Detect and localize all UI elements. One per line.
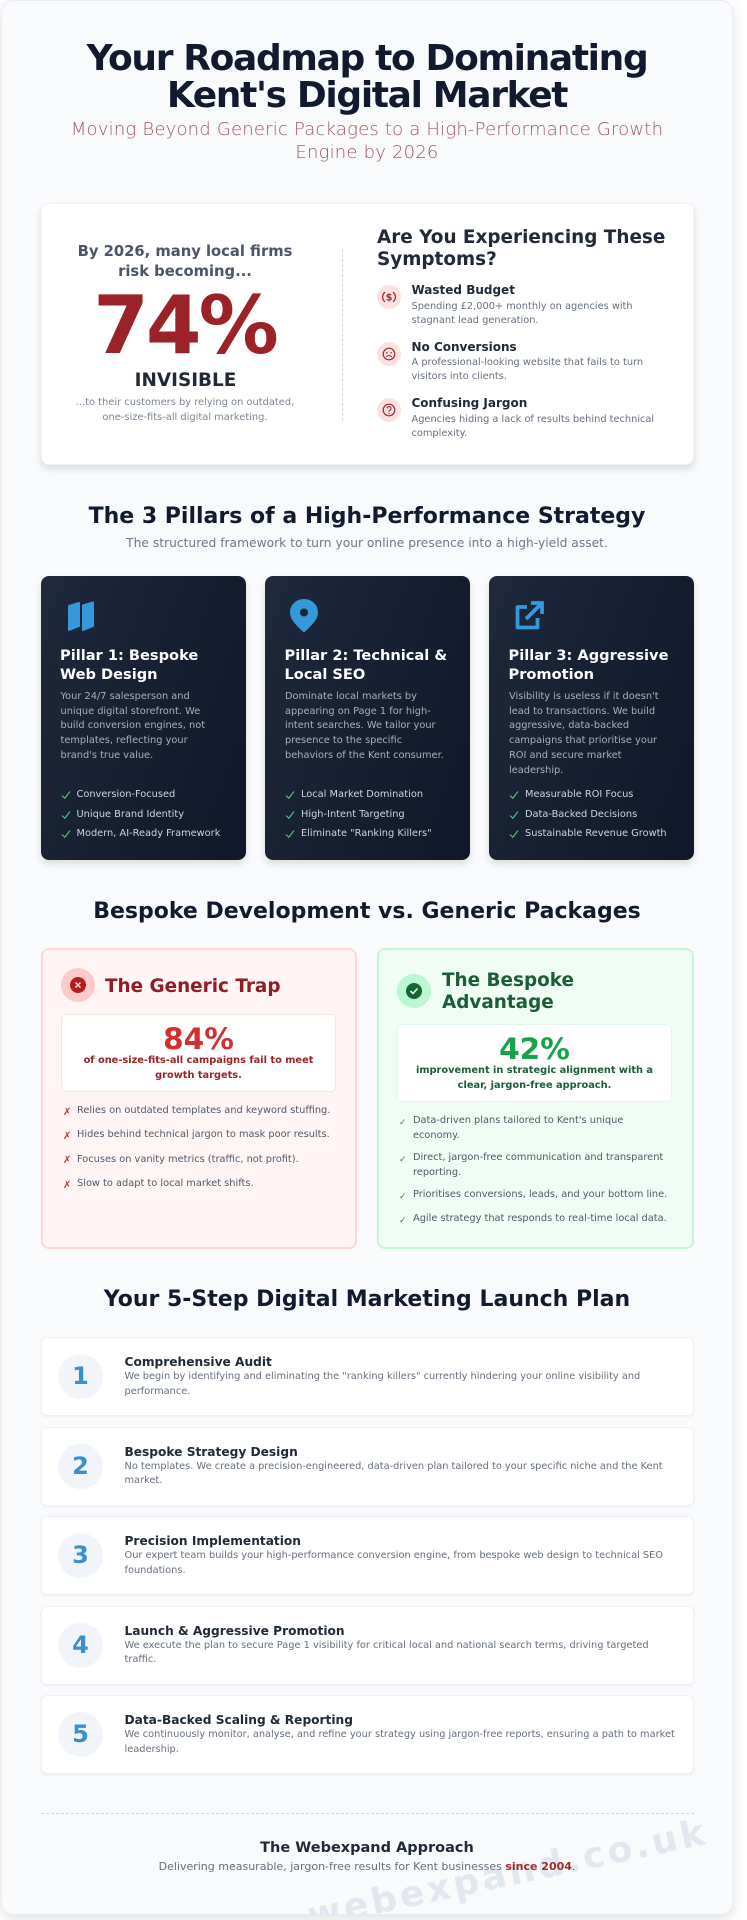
stat caption: ...to their customers by relying on outdated, — [76, 397, 294, 408]
step 2 — [41, 1426, 694, 1506]
panel heading: The Bespoke — [442, 970, 574, 991]
panel: the bespoke advantage — [377, 948, 694, 1249]
list text: Relies on outdated templates and keyword stuffing. — [77, 1105, 330, 1116]
benefit list — [510, 789, 667, 839]
check label: Eliminate "Ranking Killers" — [301, 828, 432, 839]
list text: Focuses on vanity metrics (traffic, not profit). — [77, 1154, 299, 1164]
icon: question circle — [377, 398, 401, 422]
pillar body: lead to transactions. We build — [509, 706, 655, 717]
stat box — [61, 1014, 336, 1092]
panel heading — [442, 970, 574, 1013]
check label: Unique Brand Identity — [76, 809, 184, 820]
pillar body — [60, 691, 205, 761]
icon: check circle — [397, 974, 431, 1008]
list text — [413, 1114, 623, 1143]
step title: Precision Implementation — [124, 1534, 301, 1548]
pillar body: aggressive, data-backed — [509, 720, 629, 731]
stat description: of one-size-fits-all campaigns fail to meet — [84, 1055, 313, 1066]
step number: 1 — [72, 1362, 89, 1390]
big stat: 74%: 74% — [93, 279, 276, 372]
symptoms heading: Symptoms? — [377, 249, 497, 270]
stat: 84%: 84% — [163, 1022, 234, 1056]
list text: Slow to adapt to local market shifts. — [77, 1178, 254, 1189]
benefit list — [286, 789, 432, 839]
icon: map pages — [68, 602, 94, 631]
subtitle: Engine by 2026 — [295, 142, 439, 163]
check item — [62, 830, 70, 838]
pillar heading: Promotion — [508, 666, 594, 683]
heading: launch plan: Your 5-Step Digital Marketing Launch Plan — [104, 1287, 630, 1312]
pillar body: Your 24/7 salesperson and — [60, 691, 190, 702]
pillar body: unique digital storefront. We — [60, 706, 200, 717]
step description: Our expert team builds your high-performance conversion engine, from bespoke web design to technical SEO — [124, 1550, 663, 1561]
pillar body: presence to the specific — [285, 735, 402, 746]
icon: location pin — [290, 599, 318, 632]
step number — [58, 1354, 103, 1399]
heading: comparison: Bespoke Development vs. Generic Packages — [93, 899, 641, 924]
pillar body: campaigns that prioritise your — [509, 735, 657, 746]
check label: Sustainable Revenue Growth — [525, 828, 667, 839]
panel: the generic trap — [41, 948, 357, 1249]
advantage list — [397, 1114, 687, 1229]
panel heading: The Generic Trap — [105, 976, 280, 997]
symptom description — [412, 356, 643, 382]
symptoms heading: Are You Experiencing These — [377, 227, 665, 248]
pillar body: leadership. — [509, 765, 563, 776]
step description — [124, 1728, 675, 1757]
pillar heading — [284, 646, 447, 683]
step description: foundations. — [124, 1565, 186, 1576]
icon: dollar circle — [377, 285, 401, 309]
check label: High-Intent Targeting — [301, 809, 405, 820]
list text: Prioritises conversions, leads, and your bottom line. — [413, 1189, 667, 1200]
step description: No templates. We create a precision-engineered, data-driven plan tailored to your specific niche and the Kent — [124, 1460, 663, 1472]
benefit list — [62, 789, 220, 839]
tick: ✓ — [399, 1155, 407, 1165]
panel heading: Advantage — [442, 992, 554, 1013]
stat: 42%: 42% — [499, 1032, 570, 1066]
step title: Comprehensive Audit — [124, 1355, 272, 1369]
stat description: growth targets. — [155, 1070, 242, 1081]
pillar body — [509, 691, 659, 776]
tick: ✓ — [399, 1216, 407, 1226]
symptom description: A professional-looking website that fails to turn — [412, 356, 643, 368]
cross: ✗ — [63, 1107, 71, 1118]
pillar body: Dominate local markets by — [285, 691, 417, 702]
cross: ✗ — [63, 1180, 71, 1191]
step number — [58, 1622, 103, 1668]
panel: pillar 1 — [40, 576, 246, 860]
check item — [510, 791, 518, 800]
symptom: confusing jargon — [377, 396, 654, 439]
step description: We begin by identifying and eliminating the "ranking killers" currently hindering your online visibility and — [124, 1371, 640, 1382]
stat description — [398, 1064, 671, 1093]
pillar heading: Pillar 2: Technical & — [284, 646, 447, 664]
step description: market. — [124, 1475, 162, 1486]
stat lead-in text — [78, 243, 292, 280]
title — [86, 38, 647, 116]
step title: Bespoke Strategy Design — [124, 1444, 298, 1458]
pillar body: appearing on Page 1 for high- — [285, 706, 431, 717]
panel: invisibility stat and symptoms — [41, 203, 694, 465]
step 1 — [41, 1337, 694, 1416]
check item — [286, 791, 294, 800]
stat box — [397, 1024, 672, 1102]
icon: external link — [516, 601, 544, 630]
list text: Hides behind technical jargon to mask poor results. — [77, 1129, 330, 1140]
step title: Data-Backed Scaling & Reporting — [124, 1713, 353, 1727]
step number: 2 — [72, 1452, 89, 1480]
panel: pillar 2 — [265, 576, 470, 860]
cross: ✗ — [63, 1131, 71, 1142]
step description: leadership. — [124, 1744, 179, 1755]
step number: 3 — [72, 1541, 89, 1569]
tick: ✓ — [399, 1192, 407, 1202]
trap list — [63, 1105, 330, 1191]
icon: x circle — [61, 968, 95, 1002]
pillar body: ROI and secure market — [509, 750, 622, 761]
symptom: wasted budget — [377, 282, 633, 326]
panel: pillar 3 — [489, 576, 694, 860]
symptom description: Agencies hiding a lack of results behind technical — [412, 414, 654, 424]
symptom title: Wasted Budget — [412, 282, 515, 296]
step title: Launch & Aggressive Promotion — [124, 1624, 345, 1638]
pillar body — [285, 691, 444, 761]
pillar body: templates, reflecting your — [60, 735, 188, 746]
step description — [124, 1638, 649, 1668]
list text — [413, 1151, 663, 1180]
heading: pillars: The 3 Pillars of a High-Performance Strategy — [89, 504, 645, 529]
symptom description — [412, 300, 633, 326]
check label: Modern, AI-Ready Framework — [76, 828, 220, 839]
pillar heading: Pillar 1: Bespoke — [60, 646, 198, 664]
pillar body: brand's true value. — [60, 750, 153, 761]
step description: We execute the plan to secure Page 1 visibility for critical local and national search terms, driving targeted — [124, 1640, 649, 1650]
step number — [58, 1712, 103, 1757]
check label: Measurable ROI Focus — [525, 789, 633, 800]
check item — [510, 811, 518, 820]
check item — [62, 791, 70, 800]
symptom description: complexity. — [412, 428, 467, 439]
title: Kent's Digital Market — [167, 75, 567, 116]
stat lead-in text: By 2026, many local firms — [78, 243, 292, 260]
check label: Local Market Domination — [301, 789, 423, 800]
symptom description: visitors into clients. — [412, 371, 507, 382]
list text: Agile strategy that responds to real-time local data. — [413, 1213, 667, 1224]
step description — [124, 1370, 640, 1399]
symptom title: No Conversions — [412, 340, 517, 354]
stat caption — [76, 397, 294, 423]
icon: dollar circle: $ — [386, 292, 392, 303]
pillar body: build conversion engines, not — [60, 720, 205, 731]
step 4 — [41, 1606, 694, 1684]
stat description — [84, 1055, 314, 1081]
check item — [62, 811, 70, 820]
list text: reporting. — [413, 1167, 461, 1178]
list text: Data-driven plans tailored to Kent's unique — [413, 1115, 623, 1126]
step number — [58, 1533, 103, 1578]
check item — [510, 830, 518, 838]
step number — [58, 1444, 103, 1488]
pillars subheading: The structured framework to turn your online presence into a high-yield asset. — [126, 536, 608, 550]
list text: Direct, jargon-free communication and transparent — [413, 1152, 663, 1163]
list text: economy. — [413, 1130, 460, 1141]
symptom: no conversions — [377, 340, 643, 382]
check label: Data-Backed Decisions — [525, 809, 637, 820]
pillar body: intent searches. We tailor your — [285, 720, 436, 731]
step 5 — [41, 1695, 694, 1774]
pillar body: behaviors of the Kent consumer. — [285, 750, 444, 761]
step description: We continuously monitor, analyse, and refine your strategy using jargon-free reports, ensuring a path to market — [124, 1729, 675, 1740]
footer text: Delivering measurable, jargon-free results for Kent businesses since 2004. — [159, 1860, 575, 1873]
pillar heading — [60, 646, 198, 683]
title: Your Roadmap to Dominating — [87, 38, 647, 79]
step description — [124, 1549, 663, 1578]
pillar body: Visibility is useless if it doesn't — [509, 691, 659, 702]
tick: ✓ — [399, 1118, 407, 1128]
pillar heading: Web Design — [60, 666, 158, 683]
check label: Conversion-Focused — [76, 789, 175, 800]
stat lead-in text: risk becoming... — [118, 263, 252, 280]
step description: performance. — [124, 1386, 190, 1397]
step 3 — [41, 1516, 694, 1595]
stat description: improvement in strategic alignment with a — [416, 1065, 653, 1076]
footer heading: The Webexpand Approach — [260, 1840, 474, 1856]
stat caption: one-size-fits-all digital marketing. — [102, 412, 268, 423]
pillar heading: Local SEO — [284, 666, 365, 683]
subtitle: Moving Beyond Generic Packages to a High-Performance Growth — [71, 119, 663, 140]
symptoms heading — [377, 227, 665, 270]
symptom title: Confusing Jargon — [412, 396, 527, 410]
cross: ✗ — [63, 1155, 71, 1166]
check item — [286, 830, 294, 838]
symptom description — [412, 414, 654, 439]
symptom description: stagnant lead generation. — [412, 315, 539, 326]
step number: 5 — [72, 1720, 89, 1748]
icon: sad face — [377, 342, 401, 366]
step number: 4 — [72, 1630, 89, 1658]
pillar heading — [508, 646, 668, 683]
symptom description: Spending £2,000+ monthly on agencies with — [412, 300, 633, 312]
step description — [124, 1460, 663, 1489]
stat label: invisible: INVISIBLE — [135, 370, 236, 391]
check item — [286, 811, 294, 820]
stat description: clear, jargon-free approach. — [458, 1080, 611, 1091]
pillar heading: Pillar 3: Aggressive — [508, 646, 668, 664]
subtitle — [71, 119, 663, 163]
step description: traffic. — [124, 1654, 156, 1665]
